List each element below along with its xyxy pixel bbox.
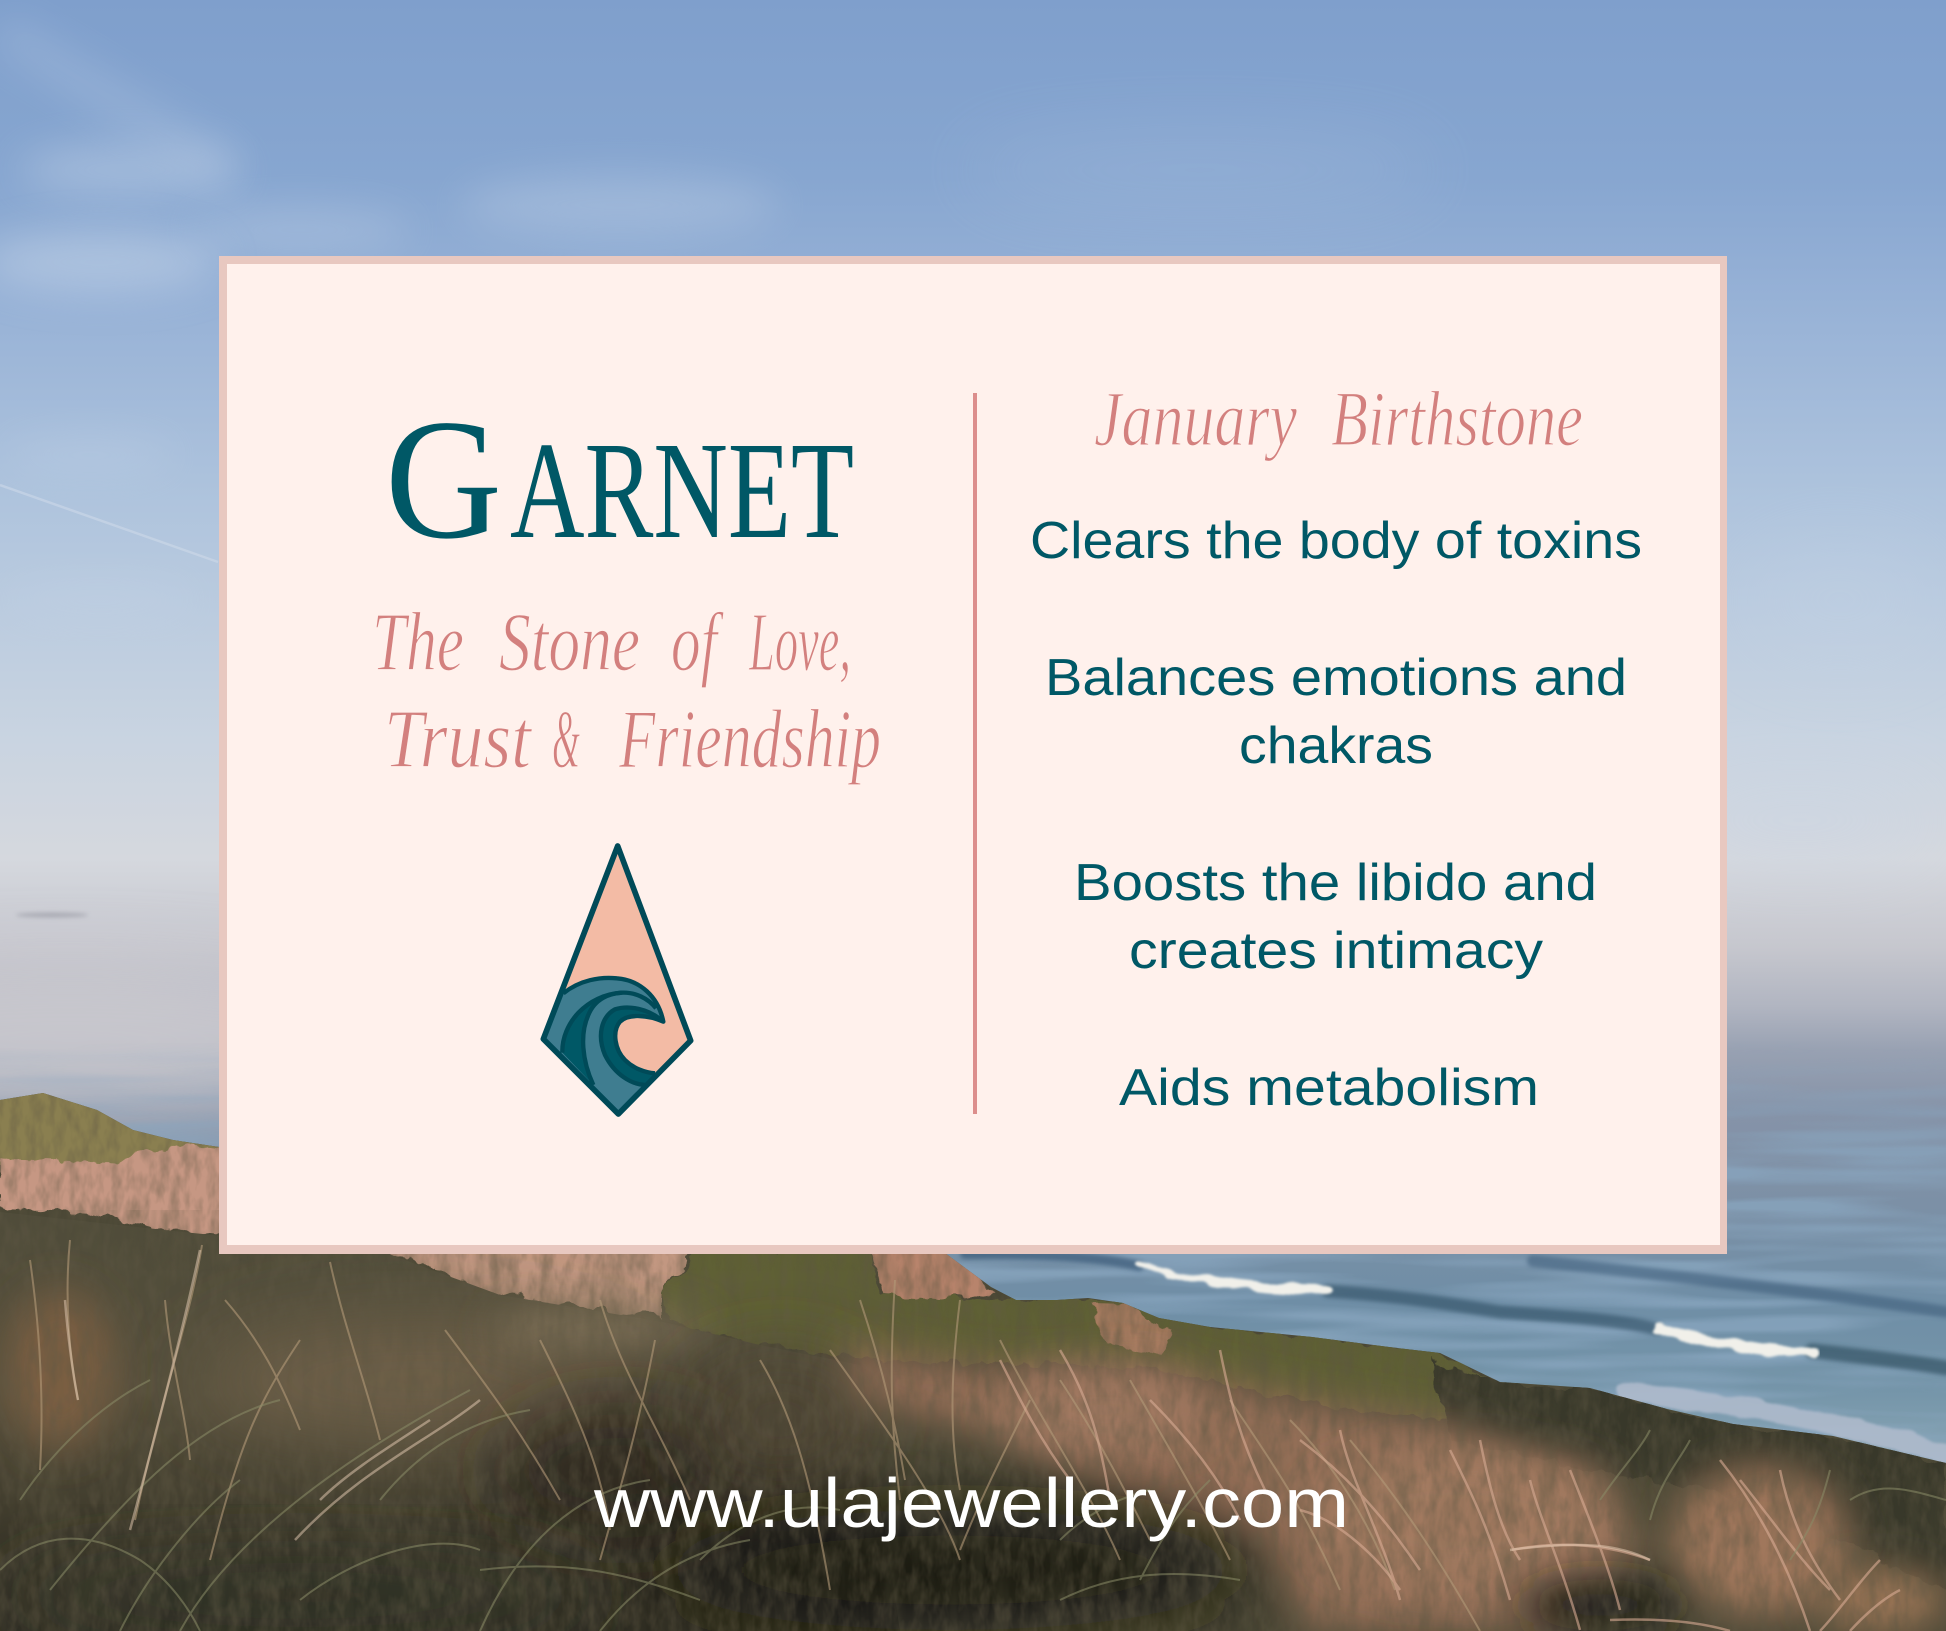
heading: Garnet: G	[385, 385, 502, 575]
textures	[0, 1090, 1946, 1631]
benefit: metabolism: Aids metabolism	[1119, 1059, 1539, 1117]
benefit: emotions and chakras: chakras	[1239, 717, 1433, 775]
grass blades	[30, 1240, 1480, 1631]
swells and foam	[965, 1254, 1946, 1455]
heading: Garnet: ARNET	[510, 414, 854, 568]
website address: www.ulajewellery.com	[593, 1464, 1349, 1542]
benefit: toxins: Clears the body of toxins	[1030, 512, 1642, 570]
pink patch under panel	[390, 1254, 688, 1320]
dune grass lights and shadows	[5, 1290, 115, 1450]
heading: Garnet	[385, 385, 854, 575]
benefit: libido and intimacy: creates intimacy	[1129, 922, 1543, 980]
clouds	[0, 30, 1940, 860]
land base	[0, 1090, 1946, 1631]
dark lower foreground	[650, 1510, 1250, 1630]
panel: card with pink border	[219, 256, 1727, 1254]
pink grass band	[840, 1345, 1640, 1631]
green bush	[663, 1250, 1500, 1420]
benefit: libido and intimacy	[1074, 854, 1597, 980]
subtitle line one	[372, 596, 851, 689]
icon: diamond with wave logo	[543, 846, 691, 1114]
subtitle line two: &	[552, 693, 580, 786]
left headland olive top	[0, 1090, 225, 1165]
subtitle line two: Trust	[384, 693, 533, 786]
subtitle line one: of	[671, 596, 725, 689]
fog on the left	[0, 970, 410, 1110]
left headland pink slope	[0, 1145, 225, 1236]
pink cliff	[872, 1254, 996, 1300]
subtitle line one: The	[372, 596, 464, 689]
subtitle line two: Friendship	[618, 693, 881, 786]
divider line	[973, 393, 977, 1114]
subtitle line two	[384, 693, 881, 786]
heading: January Birthstone: Birthstone	[1331, 375, 1583, 462]
heading: January Birthstone	[1094, 375, 1583, 462]
benefit: libido and intimacy: Boosts the libido and	[1074, 854, 1597, 912]
sea ripples	[22, 1076, 1946, 1434]
subtitle line one: Stone	[499, 596, 640, 689]
benefit: emotions and chakras	[1045, 649, 1627, 775]
dune grass	[0, 1212, 900, 1631]
subtitle line one: Love,	[748, 596, 851, 689]
heading: January Birthstone: January	[1094, 375, 1297, 462]
dark green right hillside	[1430, 1360, 1946, 1590]
benefit: emotions and chakras: Balances emotions and	[1045, 649, 1627, 707]
